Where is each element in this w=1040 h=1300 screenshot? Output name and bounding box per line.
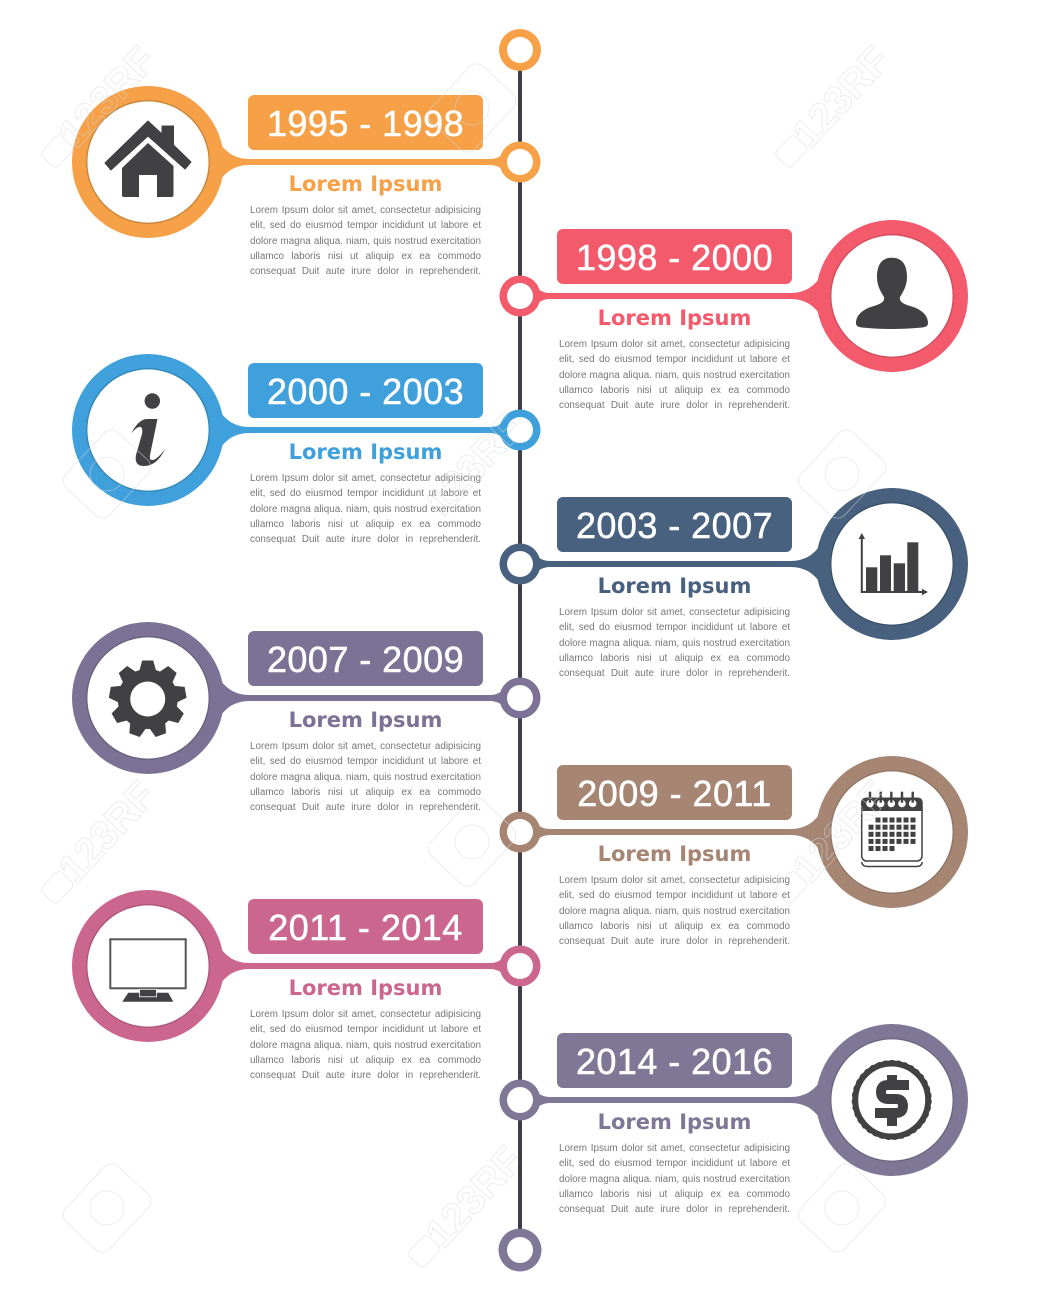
text block: consequat Duit aute irure dolor in reprehenderit. bbox=[559, 400, 790, 411]
text block: consequat Duit aute irure dolor in reprehenderit. bbox=[559, 668, 790, 679]
heading: Lorem Ipsum bbox=[598, 574, 751, 598]
date label bbox=[557, 1033, 792, 1088]
text block: dolore magna aliqua. niam, quis nostrud exercitation bbox=[250, 772, 481, 783]
text block: dolore magna aliqua. niam, quis nostrud exercitation bbox=[250, 236, 481, 247]
text block: ullamco laboris nisi ut aliquip ex ea commodo bbox=[559, 653, 790, 664]
date label bbox=[248, 631, 483, 686]
text block: Lorem Ipsum dolor sit amet, consectetur adipisicing bbox=[250, 1009, 481, 1020]
text block: consequat Duit aute irure dolor in reprehenderit. bbox=[250, 1070, 481, 1081]
date label bbox=[557, 229, 792, 284]
text block: dolore magna aliqua. niam, quis nostrud exercitation bbox=[559, 906, 790, 917]
text block: dolore magna aliqua. niam, quis nostrud exercitation bbox=[559, 370, 790, 381]
text block: ullamco laboris nisi ut aliquip ex ea commodo bbox=[559, 921, 790, 932]
icon: bar chart bbox=[859, 533, 928, 595]
text block: elit, sed do eiusmod tempor incididunt ut labore et bbox=[559, 622, 790, 633]
date label bbox=[248, 95, 483, 150]
marker ring with connector bbox=[500, 220, 968, 372]
panel: 2011 - 2014 bbox=[72, 890, 540, 1081]
marker ring with connector bbox=[500, 1024, 968, 1176]
panel: 2007 - 2009 bbox=[72, 622, 540, 813]
text block: Lorem Ipsum dolor sit amet, consectetur adipisicing bbox=[250, 473, 481, 484]
text block: elit, sed do eiusmod tempor incididunt ut labore et bbox=[250, 756, 481, 767]
marker ring with connector bbox=[500, 488, 968, 640]
text block: elit, sed do eiusmod tempor incididunt ut labore et bbox=[250, 220, 481, 231]
date label: 2014 - 2016 bbox=[576, 1041, 773, 1082]
icon: person bbox=[856, 258, 928, 329]
text block: ullamco laboris nisi ut aliquip ex ea commodo bbox=[250, 1055, 481, 1066]
stock-photo watermarks: 123RF bbox=[50, 38, 164, 156]
heading: Lorem Ipsum bbox=[598, 306, 751, 330]
panel: 2009 - 2011 bbox=[500, 756, 968, 947]
icon: gear bbox=[108, 660, 187, 738]
icon: house bbox=[105, 121, 191, 197]
text block: consequat Duit aute irure dolor in reprehenderit. bbox=[250, 266, 481, 277]
marker ring with connector bbox=[72, 622, 540, 774]
text block: elit, sed do eiusmod tempor incididunt ut labore et bbox=[559, 890, 790, 901]
text block bbox=[250, 205, 481, 277]
text block bbox=[559, 875, 790, 947]
text block: dolore magna aliqua. niam, quis nostrud exercitation bbox=[250, 1040, 481, 1051]
text block: consequat Duit aute irure dolor in reprehenderit. bbox=[559, 936, 790, 947]
date label bbox=[557, 765, 792, 820]
text block: dolore magna aliqua. niam, quis nostrud exercitation bbox=[559, 638, 790, 649]
date label: 2011 - 2014 bbox=[268, 907, 463, 948]
marker ring with connector bbox=[500, 756, 968, 908]
text block: elit, sed do eiusmod tempor incididunt ut labore et bbox=[559, 354, 790, 365]
text block: elit, sed do eiusmod tempor incididunt ut labore et bbox=[250, 488, 481, 499]
icon: info bbox=[131, 393, 165, 466]
panel: 2003 - 2007 bbox=[500, 488, 968, 679]
heading: Lorem Ipsum bbox=[289, 976, 442, 1000]
stock-photo watermarks: 123RF bbox=[417, 406, 531, 524]
text block: Lorem Ipsum dolor sit amet, consectetur adipisicing bbox=[559, 1143, 790, 1154]
text block: consequat Duit aute irure dolor in reprehenderit. bbox=[250, 802, 481, 813]
text block: ullamco laboris nisi ut aliquip ex ea commodo bbox=[250, 251, 481, 262]
text block: elit, sed do eiusmod tempor incididunt ut labore et bbox=[250, 1024, 481, 1035]
text block bbox=[250, 741, 481, 813]
panel: 2014 - 2016 bbox=[500, 1024, 968, 1215]
panel: 1995 - 1998 bbox=[72, 86, 540, 277]
text block: ullamco laboris nisi ut aliquip ex ea commodo bbox=[559, 385, 790, 396]
text block bbox=[559, 1143, 790, 1215]
stock-photo watermarks: 123RF bbox=[417, 1138, 531, 1256]
heading: Lorem Ipsum bbox=[289, 708, 442, 732]
text block: consequat Duit aute irure dolor in reprehenderit. bbox=[559, 1204, 790, 1215]
date label: 2003 - 2007 bbox=[576, 505, 773, 546]
heading: Lorem Ipsum bbox=[289, 172, 442, 196]
text block: Lorem Ipsum dolor sit amet, consectetur adipisicing bbox=[559, 607, 790, 618]
date label bbox=[248, 899, 483, 954]
date label: 2007 - 2009 bbox=[267, 639, 464, 680]
date label: 1995 - 1998 bbox=[267, 103, 464, 144]
heading: Lorem Ipsum bbox=[289, 440, 442, 464]
text block bbox=[250, 473, 481, 545]
text block: ullamco laboris nisi ut aliquip ex ea commodo bbox=[250, 519, 481, 530]
heading: Lorem Ipsum bbox=[598, 842, 751, 866]
date label: 2000 - 2003 bbox=[267, 371, 464, 412]
text block: ullamco laboris nisi ut aliquip ex ea commodo bbox=[250, 787, 481, 798]
date label bbox=[557, 497, 792, 552]
marker ring with connector bbox=[72, 354, 540, 506]
text block: consequat Duit aute irure dolor in reprehenderit. bbox=[250, 534, 481, 545]
text block: dolore magna aliqua. niam, quis nostrud exercitation bbox=[250, 504, 481, 515]
text block bbox=[559, 607, 790, 679]
date label: 2009 - 2011 bbox=[577, 773, 772, 814]
icon: calendar bbox=[861, 792, 923, 866]
panel: 1998 - 2000 bbox=[500, 220, 968, 411]
icon: monitor bbox=[110, 939, 186, 1002]
marker ring with connector bbox=[72, 890, 540, 1042]
date label bbox=[248, 363, 483, 418]
panel: 2000 - 2003 bbox=[72, 354, 540, 545]
text block bbox=[250, 1009, 481, 1081]
text block: elit, sed do eiusmod tempor incididunt ut labore et bbox=[559, 1158, 790, 1169]
stock-photo watermarks: 123RF bbox=[784, 773, 898, 891]
heading: Lorem Ipsum bbox=[598, 1110, 751, 1134]
text block: Lorem Ipsum dolor sit amet, consectetur adipisicing bbox=[250, 205, 481, 216]
stock-photo watermarks: 123RF bbox=[784, 38, 898, 156]
stock-photo watermarks: 123RF bbox=[50, 773, 164, 891]
text block bbox=[559, 339, 790, 411]
date label: 1998 - 2000 bbox=[576, 237, 773, 278]
text block: Lorem Ipsum dolor sit amet, consectetur adipisicing bbox=[559, 875, 790, 886]
text block: ullamco laboris nisi ut aliquip ex ea commodo bbox=[559, 1189, 790, 1200]
icon: dollar coin bbox=[853, 1061, 931, 1139]
text block: Lorem Ipsum dolor sit amet, consectetur adipisicing bbox=[250, 741, 481, 752]
text block: Lorem Ipsum dolor sit amet, consectetur adipisicing bbox=[559, 339, 790, 350]
text block: dolore magna aliqua. niam, quis nostrud exercitation bbox=[559, 1174, 790, 1185]
marker ring with connector bbox=[72, 86, 540, 238]
